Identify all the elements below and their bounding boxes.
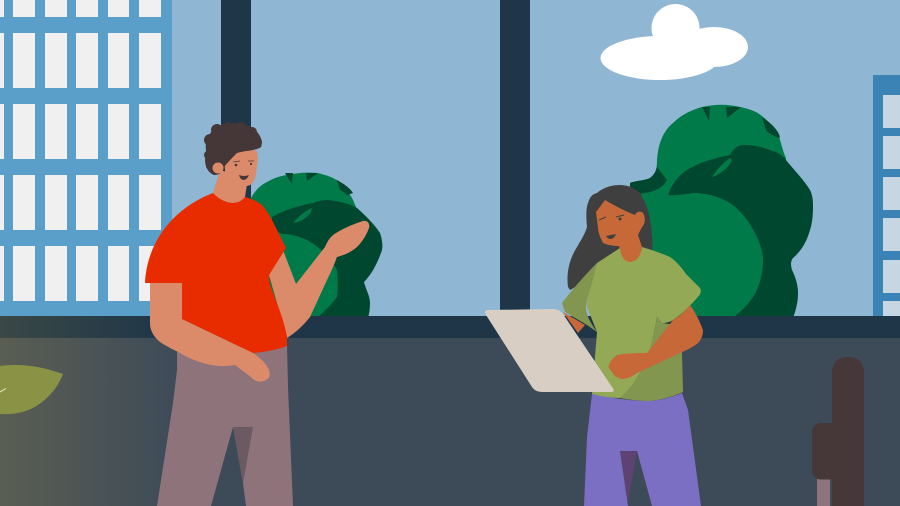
woman: near arm and hand bbox=[609, 305, 703, 379]
woman: face and neck bbox=[596, 200, 645, 262]
man: curly hair bbox=[204, 122, 262, 175]
man: shirt bbox=[145, 193, 287, 353]
leaf at left edge bbox=[0, 365, 63, 414]
woman: sleeve shadow bbox=[562, 263, 597, 332]
man: right arm raised bbox=[269, 221, 369, 338]
right building bbox=[873, 75, 900, 318]
left bush bbox=[250, 173, 382, 318]
man: face details bbox=[233, 161, 254, 180]
man: ear bbox=[212, 162, 224, 174]
wall bbox=[0, 338, 900, 506]
man: left arm bbox=[150, 283, 270, 382]
woman: far forearm bbox=[563, 312, 585, 333]
man: neck and face bbox=[213, 150, 258, 203]
cloud bbox=[600, 4, 748, 80]
woman bbox=[485, 185, 703, 506]
wall left glow bbox=[0, 338, 180, 506]
woman: tablet bbox=[485, 309, 614, 392]
chair bbox=[812, 357, 864, 506]
woman: hair bbox=[567, 185, 652, 290]
window sill band bbox=[0, 316, 900, 339]
woman: trousers bbox=[584, 393, 701, 506]
woman: lower shirt shadow bbox=[620, 317, 683, 401]
sill left glow bbox=[0, 316, 170, 339]
woman: shirt bbox=[587, 247, 701, 398]
sky bbox=[0, 0, 900, 320]
woman: face details bbox=[599, 215, 624, 239]
left building bbox=[0, 0, 172, 318]
window frame mullions bbox=[221, 0, 530, 320]
man bbox=[145, 122, 369, 506]
right bush bbox=[630, 105, 813, 318]
man: trousers bbox=[157, 344, 293, 506]
